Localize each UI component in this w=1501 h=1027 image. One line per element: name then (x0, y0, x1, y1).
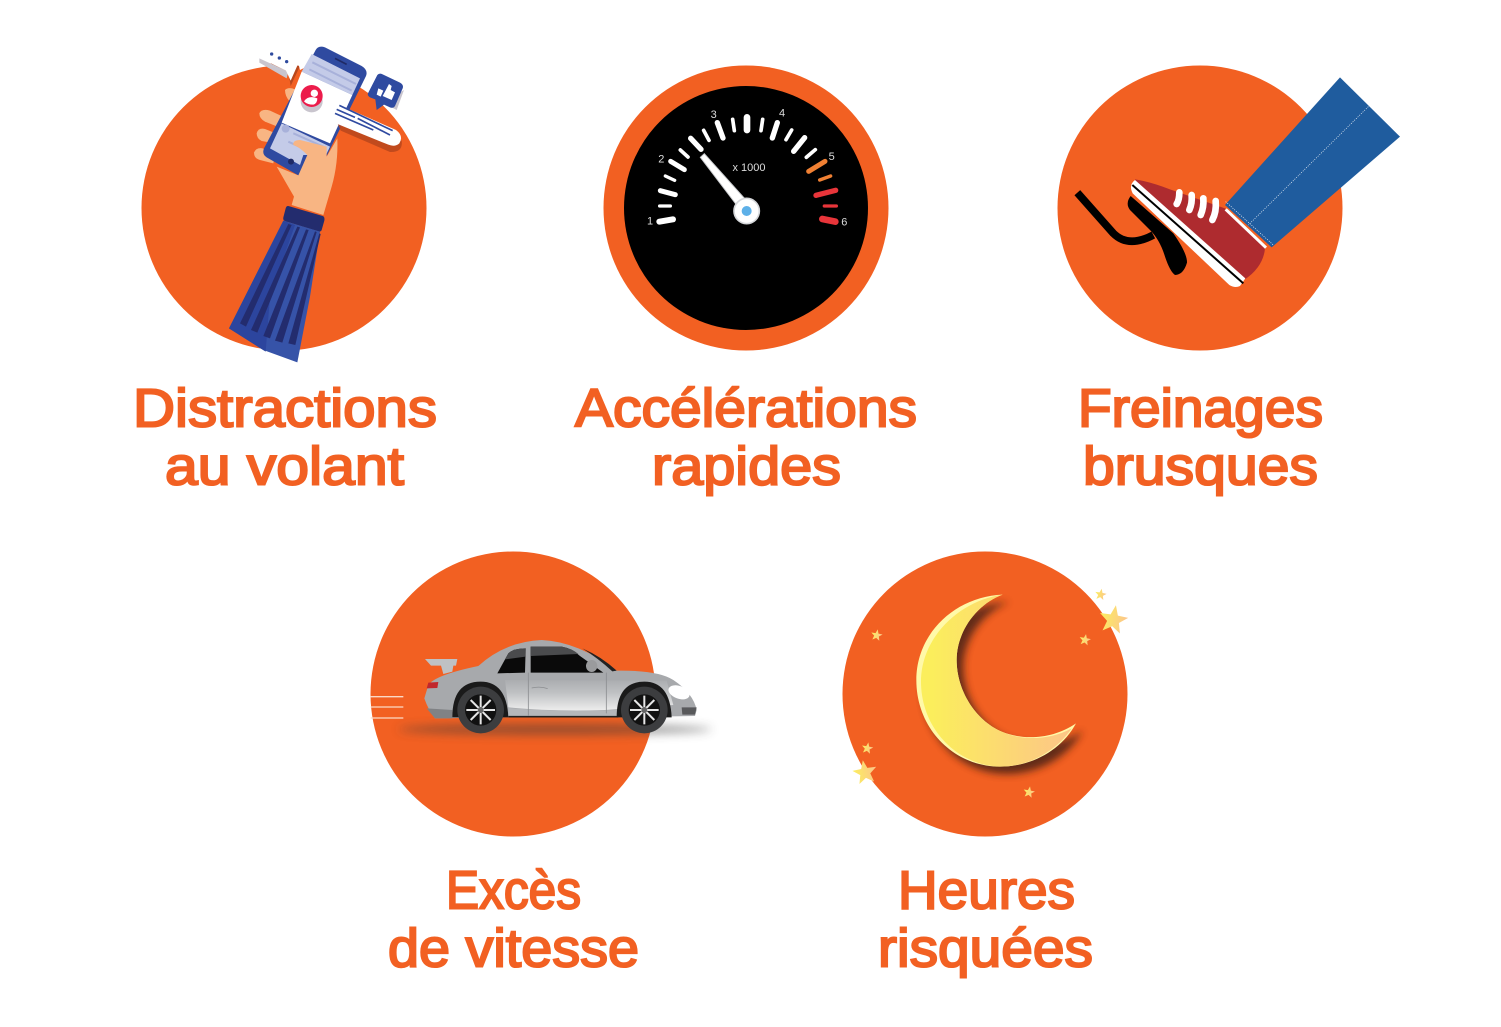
heading: accelerations rapides: Accélérations (575, 378, 917, 438)
icon: phone (263, 47, 367, 175)
gauge numbers: 2 (658, 153, 664, 165)
gauge numbers: 5 (829, 151, 835, 163)
panel: accelerations rapides (575, 66, 917, 496)
panel: heures risquees (842, 552, 1130, 978)
car door panel (505, 680, 673, 710)
gauge numbers: 6 (841, 216, 847, 228)
heading: freinages brusques (1078, 378, 1323, 496)
speed lines (371, 697, 403, 718)
circle: exces background (370, 552, 656, 836)
heading: distractions au volant: au volant (165, 436, 404, 496)
icon: hand palm (277, 138, 337, 215)
gauge hub (734, 198, 759, 224)
gauge ticks (659, 117, 836, 222)
door lines and handle (528, 673, 606, 716)
gauge numbers: 4 (779, 107, 785, 119)
gauge dial (624, 86, 868, 330)
head light (666, 683, 691, 702)
icon: message bubble (327, 104, 402, 152)
icon: sleeve (229, 221, 321, 362)
heading: freinages brusques: brusques (1083, 436, 1318, 496)
gauge numbers: 1 (647, 215, 653, 227)
heading: heures risquees: Heures (898, 860, 1075, 920)
icon: hand holding phone (229, 47, 404, 362)
windows (497, 647, 617, 673)
icon: speeding car (371, 640, 712, 735)
car body (424, 640, 697, 718)
heading: exces de vitesse: Excès (446, 860, 581, 920)
icon: fingers (254, 88, 295, 163)
spoiler (425, 659, 457, 674)
stars (851, 588, 1130, 798)
moon crescent (921, 595, 1072, 767)
heading: exces de vitesse (388, 860, 639, 978)
icon: moon and stars (851, 588, 1130, 798)
circle: freinages background (1058, 66, 1342, 350)
heading: distractions au volant: Distractions (133, 378, 437, 438)
heading: heures risquees (878, 860, 1093, 978)
heading: exces de vitesse: de vitesse (388, 918, 639, 978)
heading: distractions au volant (133, 378, 437, 496)
front wheel (617, 682, 672, 733)
icon: like bubble (368, 74, 404, 110)
icon: cuff (283, 206, 324, 231)
panel: freinages brusques (1058, 66, 1400, 496)
heading: accelerations rapides: rapides (652, 436, 841, 496)
icon: avatar (301, 85, 323, 112)
front bumper (682, 707, 697, 715)
icon: foot on brake pedal (1077, 77, 1400, 287)
heading: heures risquees: risquées (878, 918, 1093, 978)
gauge numbers: x 1000 (733, 162, 765, 174)
sill line (508, 714, 618, 719)
pedal (1077, 193, 1187, 275)
gauge numbers: 3 (711, 109, 717, 121)
car shadow (398, 724, 712, 735)
moon rim (916, 595, 1076, 767)
trouser leg (1225, 77, 1400, 247)
shoe (1131, 179, 1266, 287)
circle: distractions background (142, 66, 426, 350)
panel: exces de vitesse (370, 552, 712, 978)
moon shadow (923, 602, 1083, 774)
heading: accelerations rapides (575, 378, 917, 496)
gauge numbers (647, 107, 847, 228)
icon: speedometer (624, 86, 868, 330)
tail light (427, 682, 438, 688)
circle: accelerations background (604, 66, 888, 350)
gauge needle (700, 154, 746, 206)
circle: heures background (842, 552, 1128, 836)
sill (508, 708, 618, 716)
icon: left speech bubble (259, 50, 313, 86)
heading: freinages brusques: Freinages (1078, 378, 1323, 438)
panel: distractions au volant (133, 47, 437, 496)
rear bumper (427, 708, 452, 718)
rear wheel (452, 682, 508, 733)
